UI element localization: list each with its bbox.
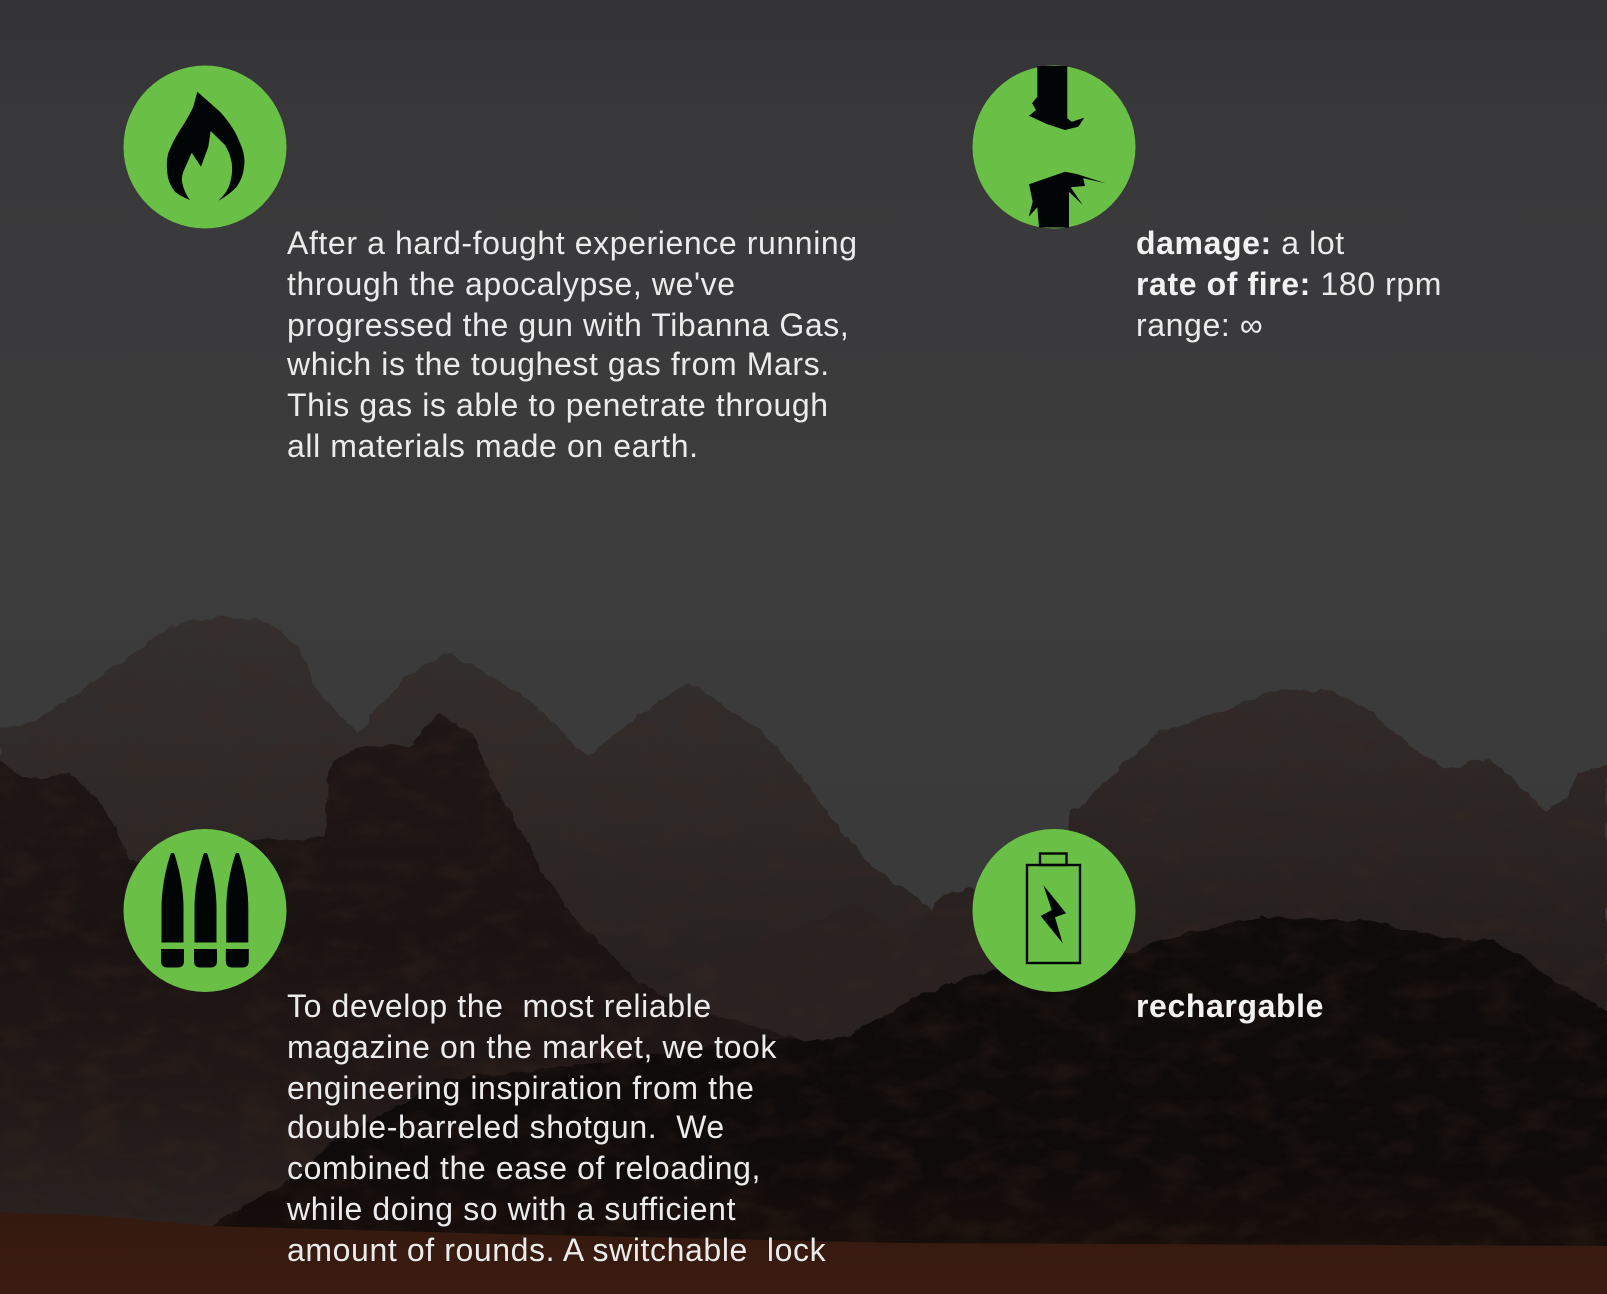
text block: gas description: through the apocalypse, we've	[287, 266, 736, 302]
text block: magazine description: combined the ease of reloading,	[287, 1150, 761, 1186]
text block: gas description: all materials made on earth.	[287, 428, 699, 464]
text block: magazine description	[287, 988, 826, 1268]
text block: magazine description: while doing so with a sufficient	[287, 1191, 736, 1227]
text block: magazine description: magazine on the market, we took	[287, 1029, 777, 1065]
text block: gas description: After a hard-fought experience running	[287, 225, 858, 261]
icon: three rounds of ammunition	[124, 829, 286, 992]
text block: gas description: which is the toughest gas from Mars.	[287, 346, 830, 382]
text block: magazine description: amount of rounds. A switchable lock	[287, 1232, 826, 1268]
text block: weapon stats: range: ∞	[1136, 307, 1263, 343]
text: rechargeable label: rechargable	[1136, 988, 1324, 1024]
text block: weapon stats: damage: a lot	[1136, 225, 1345, 261]
text block: magazine description: double-barreled shotgun. We	[287, 1109, 725, 1145]
text block: gas description: progressed the gun with Tibanna Gas,	[287, 307, 849, 343]
icon: flame	[124, 66, 286, 228]
icon: rechargeable battery	[972, 829, 1136, 992]
text block: weapon stats	[1136, 225, 1442, 343]
text block: gas description: This gas is able to penetrate through	[287, 387, 829, 423]
text block: magazine description: To develop the most reliable	[287, 988, 712, 1024]
text block: weapon stats: rate of fire: 180 rpm	[1136, 266, 1442, 302]
icon: broken barrel	[972, 66, 1136, 228]
text block: magazine description: engineering inspiration from the	[287, 1070, 754, 1106]
text block: gas description	[287, 225, 858, 464]
